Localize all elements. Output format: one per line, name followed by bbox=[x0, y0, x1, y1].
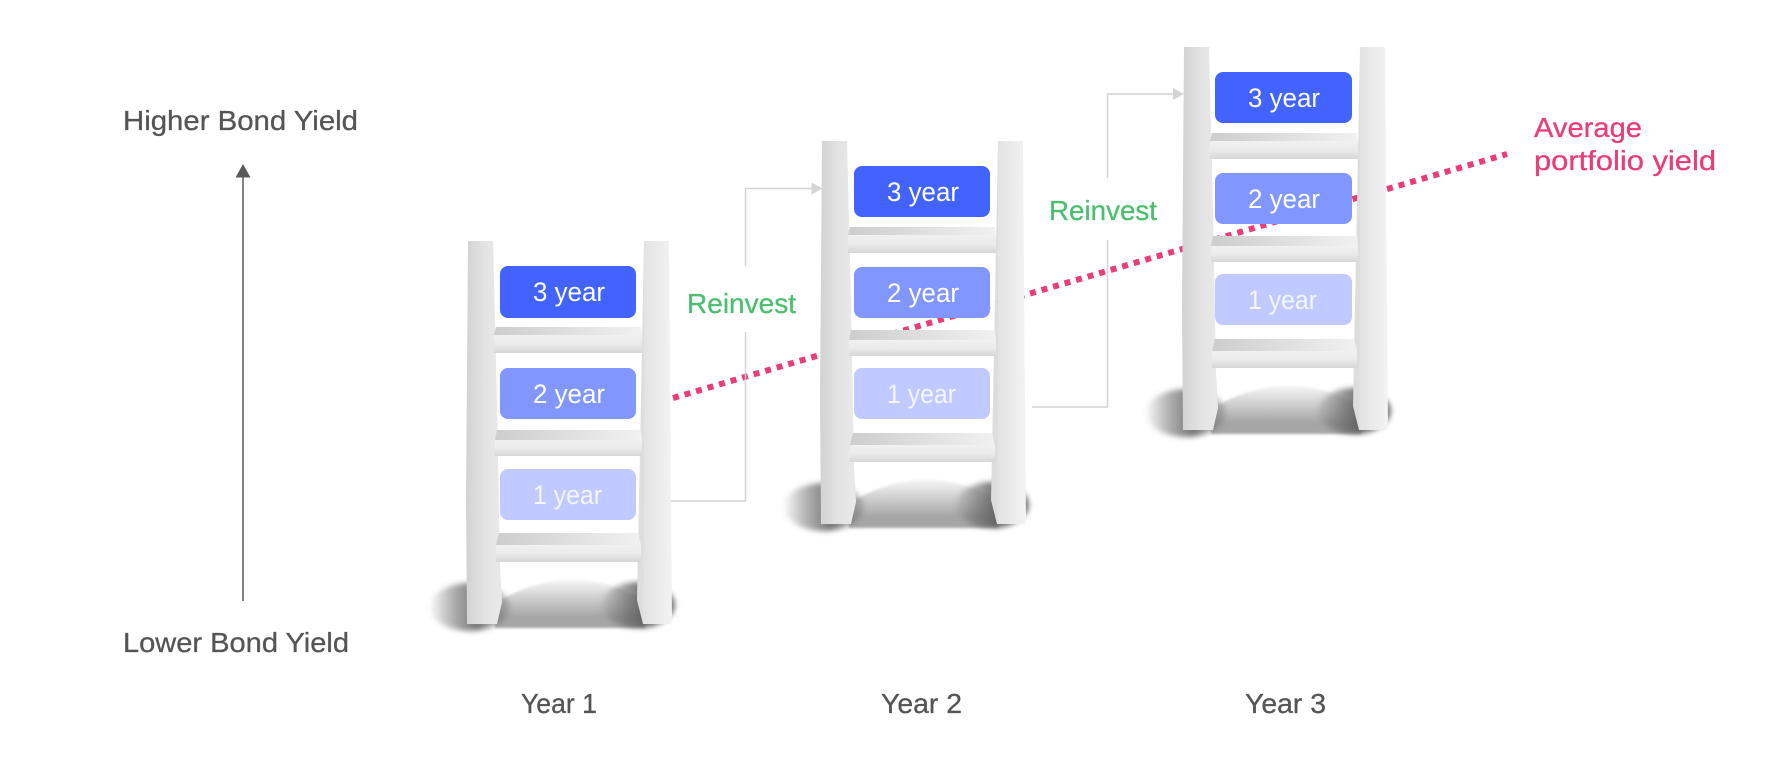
label: year 1: Year 1 bbox=[521, 688, 597, 719]
panel: ladder year 3 bbox=[1146, 47, 1391, 437]
rung box: 3 year bbox=[854, 166, 990, 217]
label: average portfolio yield: Average bbox=[1534, 112, 1642, 143]
label: reinvest 1: Reinvest bbox=[687, 288, 796, 319]
heading: lower bond yield: Lower Bond Yield bbox=[123, 627, 349, 658]
rung box: 3 year bbox=[500, 266, 636, 318]
rung box: 1 year bbox=[854, 368, 990, 419]
rung box: 2 year bbox=[854, 267, 990, 318]
label: average portfolio yield: portfolio yield bbox=[1534, 145, 1716, 176]
rung box: 2 year bbox=[500, 368, 636, 419]
arrow: reinvest year 2 to year 3 bbox=[1032, 88, 1184, 407]
rung box: 3 year: 3 year bbox=[1248, 83, 1320, 113]
label: year 2: Year 2 bbox=[881, 688, 962, 719]
panel: ladder year 2 bbox=[784, 141, 1029, 531]
rung box: 1 year bbox=[1215, 274, 1352, 325]
rung box: 1 year bbox=[500, 469, 636, 520]
panel: ladder year 1 bbox=[430, 241, 675, 631]
chart line: average portfolio yield bbox=[673, 154, 1507, 398]
rung box: 2 year: 2 year bbox=[533, 379, 605, 409]
rung box: 3 year bbox=[1215, 72, 1352, 123]
rung box: 1 year: 1 year bbox=[533, 480, 602, 510]
arrow: reinvest year 1 to year 2 bbox=[670, 182, 822, 501]
rung box: 1 year: 1 year bbox=[887, 379, 956, 409]
rung box: 3 year: 3 year bbox=[533, 277, 605, 307]
arrow: yield axis bbox=[236, 164, 250, 601]
rung box: 2 year bbox=[1215, 173, 1352, 224]
label: year 3: Year 3 bbox=[1245, 688, 1326, 719]
rung box: 1 year: 1 year bbox=[1248, 285, 1317, 315]
heading: higher bond yield: Higher Bond Yield bbox=[123, 105, 358, 136]
rung box: 2 year: 2 year bbox=[1248, 184, 1320, 214]
rung box: 2 year: 2 year bbox=[887, 278, 959, 308]
label: reinvest 2: Reinvest bbox=[1049, 195, 1157, 226]
rung box: 3 year: 3 year bbox=[887, 177, 959, 207]
